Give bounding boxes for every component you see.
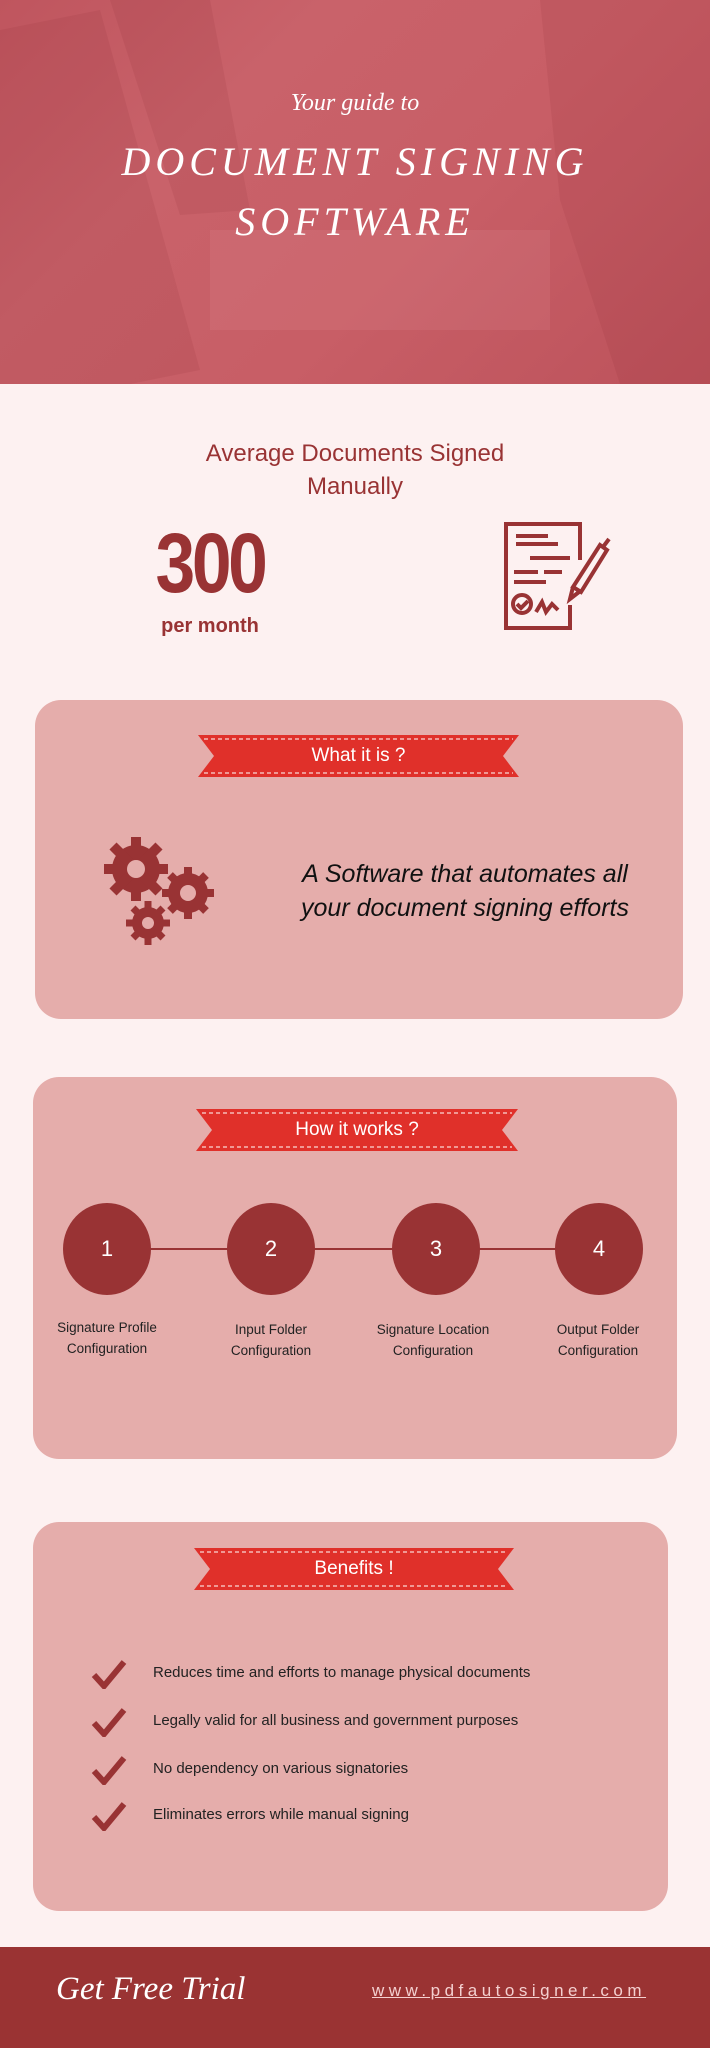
step 3: 3 (430, 1236, 442, 1261)
label 4: Output Folder (557, 1322, 639, 1337)
label 4 (557, 1322, 640, 1358)
label 4: Configuration (558, 1343, 638, 1358)
panel: how it works (33, 1077, 677, 1459)
step 2: 2 (265, 1236, 277, 1261)
label 1: Configuration (67, 1341, 147, 1356)
label 3 (377, 1322, 489, 1358)
label 1 (57, 1320, 157, 1356)
footer (0, 1947, 710, 2048)
ribbon: how it works: How it works ? (295, 1119, 419, 1140)
benefit 4: Eliminates errors while manual signing (153, 1806, 409, 1823)
stat number: per month (161, 615, 259, 637)
stat heading: Average Documents Signed (206, 440, 504, 467)
title: SOFTWARE (235, 199, 475, 244)
benefit 1 (92, 1660, 530, 1689)
label 2: Configuration (231, 1343, 311, 1358)
step 4 (555, 1203, 643, 1295)
subtitle: Your guide to (291, 90, 419, 116)
header banner (0, 0, 710, 384)
call to action: Get Free Trial (56, 1971, 245, 2007)
step 2 (227, 1203, 315, 1295)
ribbon: what it is: What it is ? (312, 745, 405, 766)
stat heading (206, 440, 504, 500)
website url: www.pdfautosigner.com (372, 1981, 646, 2000)
step 4: 4 (593, 1236, 605, 1261)
ribbon: what it is (198, 735, 519, 777)
title (121, 139, 589, 244)
ribbon: benefits: Benefits ! (314, 1558, 394, 1579)
stat number: 300 (156, 516, 264, 610)
step 1: 1 (101, 1236, 113, 1261)
label 3: Configuration (393, 1343, 473, 1358)
description: A Software that automates all your document signing efforts (301, 860, 629, 922)
panel: what it is (35, 700, 683, 1019)
panel: benefits (33, 1522, 668, 1911)
stat heading: Manually (307, 473, 403, 500)
title: DOCUMENT SIGNING (121, 139, 589, 184)
label 2 (231, 1322, 311, 1358)
icon: gears (104, 837, 214, 945)
label 1: Signature Profile (57, 1320, 157, 1335)
step 3 (392, 1203, 480, 1295)
step 1 (63, 1203, 151, 1295)
benefit 3 (92, 1756, 408, 1785)
ribbon: how it works (196, 1109, 518, 1151)
benefit 2: Legally valid for all business and government purposes (153, 1712, 518, 1729)
benefit 2 (92, 1708, 518, 1737)
benefit 4 (92, 1802, 409, 1831)
label 3: Signature Location (377, 1322, 489, 1337)
ribbon: benefits (194, 1548, 514, 1590)
label 2: Input Folder (235, 1322, 307, 1337)
benefit 1: Reduces time and efforts to manage physical documents (153, 1664, 530, 1681)
benefit 3: No dependency on various signatories (153, 1760, 408, 1777)
icon: signed document (504, 522, 610, 630)
